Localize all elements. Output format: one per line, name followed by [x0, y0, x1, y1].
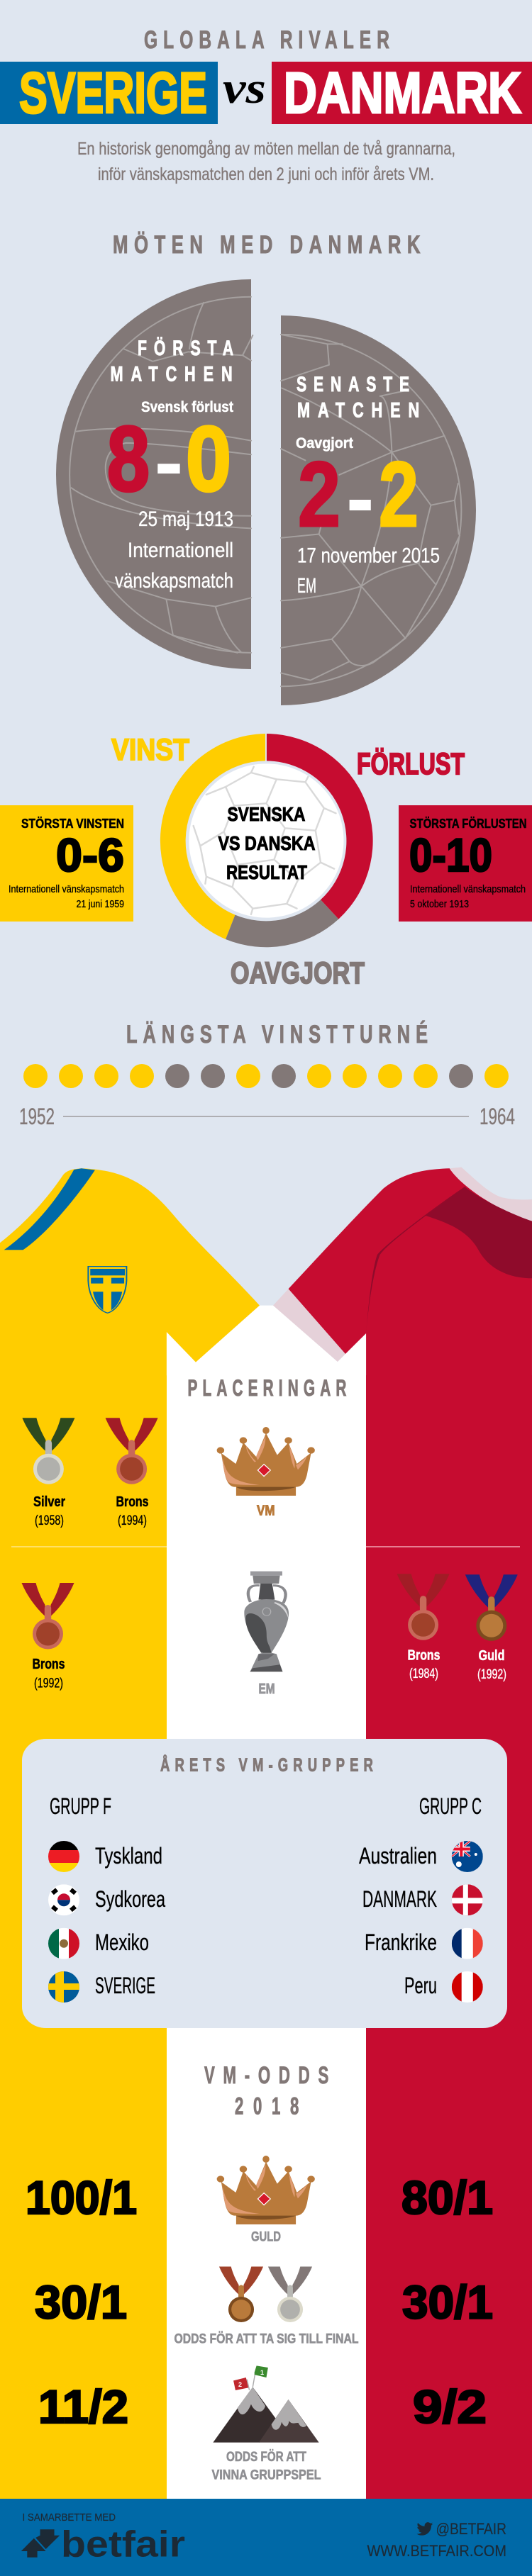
- timeline dots: [23, 1064, 509, 1088]
- flag: France: [452, 1928, 483, 1959]
- betfair logo: [21, 2524, 185, 2565]
- callout: biggest win: [0, 805, 133, 922]
- website: WWW.BETFAIR.COM: [367, 2542, 506, 2560]
- panel: World Cup groups: [22, 1739, 507, 2028]
- label: Sweden: SVERIGE: [95, 1973, 155, 1998]
- flag: South Korea: [48, 1884, 79, 1915]
- timeline axis: 1952: [19, 1104, 55, 1129]
- score 8-0: [107, 407, 231, 510]
- odds row: gold: GULD: [251, 2230, 281, 2245]
- flag: Australia: [452, 1841, 483, 1872]
- heading: meetings with Denmark: MÖTEN MED DANMARK: [113, 231, 426, 259]
- flag: Mexico: [48, 1928, 79, 1959]
- icon: bronze medal 1994: Brons: [116, 1494, 149, 1510]
- latest match heading: SENASTE: [297, 373, 416, 396]
- donut centre label: RESULTAT: [226, 861, 307, 883]
- callout: biggest loss: 0-10: [409, 829, 492, 881]
- heading: World Cup odds: 2018: [235, 2093, 309, 2120]
- icon: gold medal 1992: [465, 1574, 518, 1682]
- first match heading: [111, 337, 240, 386]
- Swedish shirt: [0, 1168, 260, 1376]
- flag: Peru: [452, 1971, 483, 2003]
- icon: bronze medal 1992: [21, 1583, 74, 1691]
- icon: mountains with flags: [213, 2365, 319, 2443]
- icon: EM trophy: [244, 1572, 289, 1697]
- shirts: [0, 1167, 532, 1376]
- callout: biggest win: 21 juni 1959: [77, 898, 124, 910]
- first match details: 25 maj 1913: [138, 508, 233, 531]
- icon: bronze medal 1984: Brons: [407, 1648, 440, 1664]
- icon: bronze medal 1994: [106, 1418, 158, 1528]
- label: France: Frankrike: [365, 1930, 437, 1955]
- intro text: inför vänskapsmatchen den 2 juni och inför årets VM.: [98, 164, 434, 184]
- first match heading: MATCHEN: [111, 363, 240, 386]
- icon: bronze medal 1992: Brons: [33, 1657, 65, 1672]
- donut label: loss: FÖRLUST: [357, 747, 465, 781]
- icon: silver medal 1958: [22, 1418, 74, 1528]
- donut centre label: [218, 803, 315, 883]
- icon: crown: [217, 2156, 315, 2224]
- label: South Korea: Sydkorea: [95, 1886, 165, 1912]
- heading: World Cup odds: VM-ODDS: [204, 2062, 337, 2089]
- icon: bronze medal 1994: (1994): [118, 1513, 147, 1528]
- score 2-2: [298, 442, 419, 547]
- odds row: win group: 11/2: [38, 2380, 128, 2433]
- score 2-2: 2: [379, 442, 419, 546]
- segment: wins: [160, 734, 265, 939]
- icon: twitter bird: [417, 2522, 433, 2536]
- label: Germany: Tyskland: [95, 1843, 162, 1869]
- first match details: [115, 508, 233, 593]
- icon: mountains with flags: 2: [238, 2381, 242, 2388]
- timeline axis: [19, 1104, 515, 1129]
- donut label: draw: OAVGJORT: [231, 956, 365, 990]
- donut centre label: VS DANSKA: [218, 832, 315, 854]
- callout: biggest loss: 5 oktober 1913: [410, 898, 469, 910]
- callout: biggest win: 0-6: [56, 829, 124, 881]
- score 8-0: 0: [186, 407, 231, 510]
- panel heading: ÅRETS VM-GRUPPER: [160, 1754, 378, 1776]
- heading: World Cup odds: [204, 2062, 337, 2120]
- icon: Swedish crest: [88, 1267, 126, 1313]
- ball centre: [189, 763, 344, 918]
- flag: Sweden: [48, 1971, 79, 2003]
- score 2-2: 2: [298, 442, 340, 546]
- label: Denmark: DANMARK: [362, 1886, 437, 1912]
- odds row: reach final: [35, 2267, 493, 2347]
- title banner: [0, 61, 532, 125]
- ball seams right: [281, 335, 461, 686]
- icon: crown (VM): VM: [257, 1503, 275, 1519]
- icon: EM trophy: EM: [258, 1681, 275, 1697]
- result note: Oavgjort: [296, 435, 353, 452]
- latest match details: 17 november 2015: [297, 544, 440, 567]
- label: Peru: Peru: [404, 1973, 437, 1998]
- panel: first match half ball: [56, 279, 253, 669]
- odds row: reach final: 30/1: [35, 2276, 127, 2329]
- score 2-2: -: [346, 447, 375, 547]
- Sverige banner: SVERIGE: [19, 61, 207, 125]
- odds row: gold: 80/1: [401, 2171, 493, 2224]
- icon: gold medal 1992: (1992): [477, 1667, 506, 1682]
- icon: bronze medal 1992: (1992): [34, 1676, 63, 1691]
- icon: gold medal 1992: Guld: [478, 1648, 505, 1664]
- white notch between shirts: [167, 1306, 366, 1376]
- callout: biggest loss: [399, 805, 532, 922]
- social handle: @BETFAIR: [436, 2520, 506, 2538]
- divider lines: [11, 1546, 520, 1547]
- icon: mountains with flags: 1: [260, 2369, 264, 2376]
- first match details: Internationell: [128, 539, 233, 562]
- odds row: gold: [26, 2156, 493, 2245]
- odds row: win group: 9/2: [413, 2380, 487, 2433]
- intro text: [77, 139, 455, 184]
- score 8-0: -: [155, 417, 183, 508]
- donut chart: Swedish vs Danish results: [160, 734, 373, 947]
- icon: crown (VM): [217, 1427, 315, 1519]
- icon: bronze medal 1984: [397, 1574, 450, 1681]
- group C title: GRUPP C: [419, 1793, 482, 1819]
- latest match details: [297, 544, 440, 598]
- flag: Denmark: [452, 1884, 483, 1915]
- betfair logo: betfair: [61, 2524, 185, 2565]
- score 8-0: 8: [107, 407, 150, 510]
- flag: Germany: [48, 1841, 79, 1872]
- panel: latest match half ball: [281, 315, 476, 705]
- kicker heading: GLOBALA RIVALER: [144, 26, 395, 54]
- icon: silver medal 1958: Silver: [33, 1494, 65, 1510]
- vs script: vs: [223, 65, 266, 113]
- odds row: reach final: ODDS FÖR ATT TA SIG TILL FINAL: [174, 2332, 359, 2347]
- heading: placements: PLACERINGAR: [187, 1375, 352, 1401]
- odds row: win group: ODDS FÖR ATT: [226, 2450, 306, 2465]
- first match details: vänskapsmatch: [115, 569, 233, 593]
- latest match heading: [297, 373, 427, 422]
- timeline axis: 1964: [480, 1104, 515, 1129]
- result note: Svensk förlust: [141, 399, 233, 415]
- group F title: GRUPP F: [50, 1793, 111, 1819]
- latest match heading: MATCHEN: [297, 398, 427, 422]
- first match heading: FÖRSTA: [138, 337, 240, 360]
- callout: biggest win: STÖRSTA VINSTEN: [21, 817, 124, 831]
- icon: bronze medal 1984: (1984): [409, 1667, 438, 1681]
- donut label: win: VINST: [111, 733, 189, 767]
- segment: draws: [226, 900, 338, 947]
- callout: biggest win: Internationell vänskapsmatch: [9, 883, 124, 895]
- lower colour columns: [0, 1375, 532, 2499]
- odds row: win group: [38, 2365, 487, 2483]
- ball seams: [194, 767, 336, 914]
- footer: [0, 2499, 532, 2576]
- partner note: I SAMARBETTE MED: [23, 2511, 116, 2524]
- latest match details: EM: [297, 574, 316, 598]
- ball seams left: [70, 297, 253, 653]
- Danish shirt: [273, 1167, 532, 1376]
- donut centre label: SVENSKA: [227, 803, 305, 825]
- icon: finalist medals: [219, 2267, 312, 2322]
- odds row: gold: 100/1: [26, 2171, 137, 2224]
- odds row: reach final: 30/1: [402, 2276, 493, 2329]
- icon: silver medal 1958: (1958): [35, 1513, 64, 1528]
- label: Australia: Australien: [359, 1843, 437, 1869]
- segment: losses: [267, 734, 373, 919]
- label: Mexico: Mexiko: [95, 1930, 149, 1955]
- odds row: win group: VINNA GRUPPSPEL: [211, 2468, 321, 2483]
